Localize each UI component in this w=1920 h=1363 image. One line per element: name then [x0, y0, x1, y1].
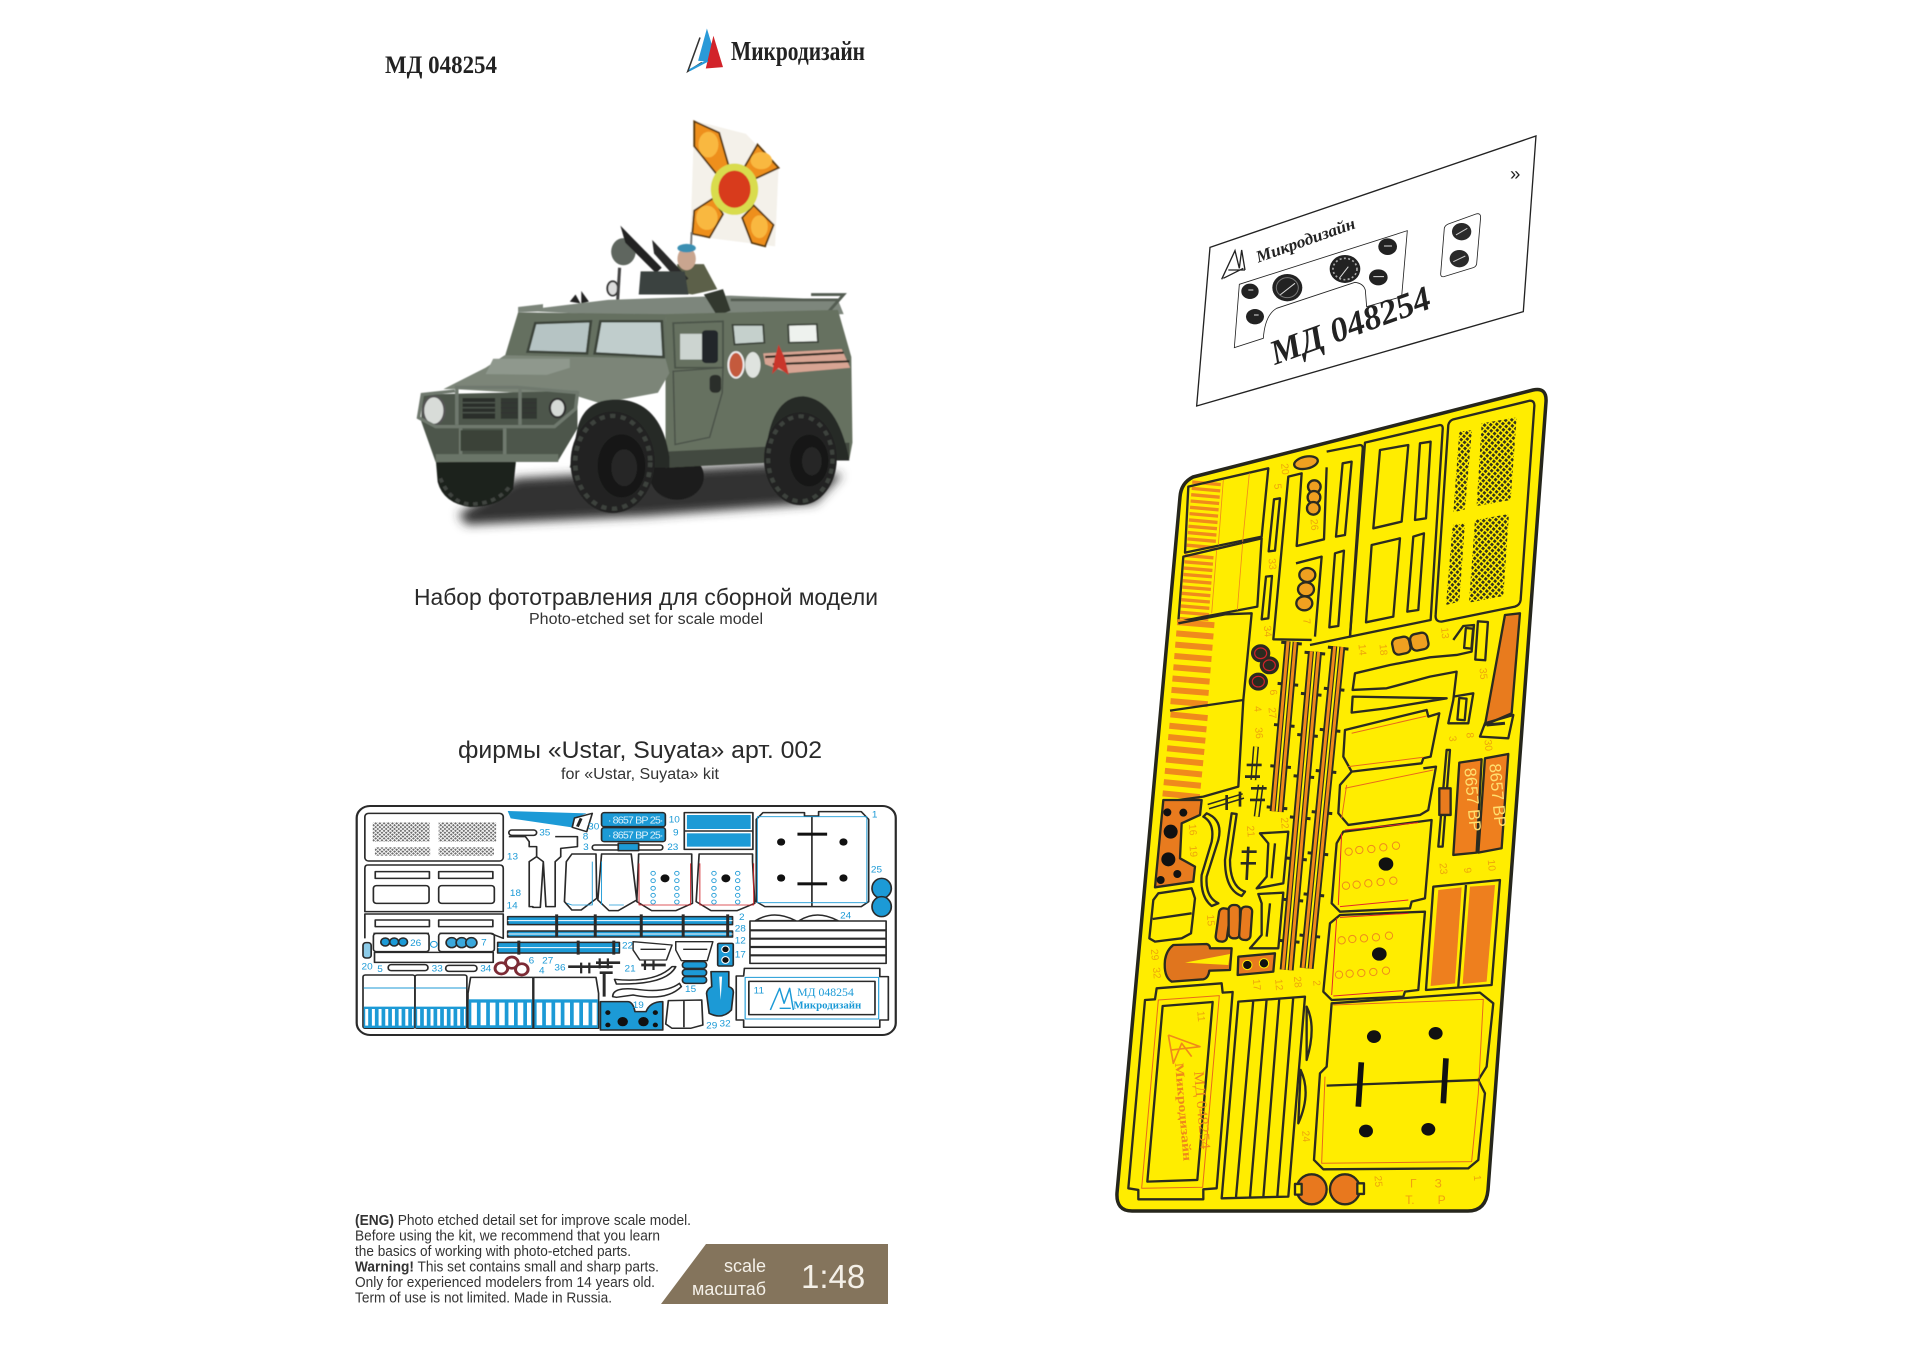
sheet outline [357, 806, 896, 1035]
hood [443, 355, 669, 403]
small plate 17 [1238, 953, 1275, 975]
slotted frame panel [1273, 445, 1363, 645]
rear wheel [764, 412, 837, 505]
blue part numbers [362, 810, 882, 1031]
T-shaped parts [1352, 621, 1488, 723]
part numbers [1251, 463, 1493, 752]
clips and wires [568, 958, 681, 997]
part numbers: 5 [1271, 483, 1283, 490]
part numbers: 21 [1244, 825, 1256, 838]
part numbers: 28 [1291, 976, 1303, 989]
part numbers: 34 [1261, 625, 1273, 638]
sheet outline [1197, 136, 1536, 406]
centre rear wheel [650, 453, 704, 500]
dashboard decal [1234, 231, 1407, 348]
blue part numbers: 34 [480, 964, 492, 974]
blue part numbers: 9 [673, 828, 679, 838]
decal code: МД 048254 [1264, 279, 1436, 373]
round orange parts [1295, 1174, 1364, 1204]
heading: russian subtitle: Набор фототравления для сборной модели [414, 584, 878, 610]
blue part numbers: 2 [739, 912, 745, 923]
part numbers: Г [1410, 1176, 1417, 1190]
part numbers: 3 [1446, 735, 1458, 742]
part numbers: 32 [1150, 967, 1162, 980]
closing quote mark: » [1510, 163, 1520, 184]
door [673, 368, 723, 444]
part numbers: 16 [1186, 824, 1198, 836]
small plate 17 [718, 943, 733, 966]
part numbers: 23 [1436, 863, 1448, 875]
warning text block [355, 1213, 691, 1306]
orange rectangles [1426, 880, 1500, 990]
roof [520, 296, 844, 318]
part numbers: 35 [1476, 668, 1488, 680]
blue part numbers: 14 [507, 901, 518, 911]
blue part numbers: 7 [481, 938, 487, 948]
icon: small logo [1222, 250, 1245, 279]
orange wedge part [1480, 613, 1520, 738]
blue part numbers: 21 [625, 964, 636, 974]
part numbers: 17 [1250, 979, 1262, 991]
rear windows [673, 321, 723, 368]
blue part numbers: 22 [622, 941, 633, 951]
hinge piece [1149, 888, 1195, 942]
blue part numbers: 8 [583, 832, 588, 842]
part numbers: 22 [1278, 817, 1290, 830]
right front wheel [571, 412, 655, 513]
panel: yellow etched fret [1117, 390, 1546, 1211]
blue part numbers: 25 [871, 865, 882, 875]
blue part numbers: 29 [706, 1021, 717, 1031]
ground shadow [459, 464, 842, 525]
part numbers: 25 [1371, 1175, 1383, 1188]
scale label english: scale [724, 1256, 766, 1276]
warning text block: Warning! This set contains small and sharp parts. [355, 1260, 659, 1276]
part numbers: 18 [1376, 644, 1388, 656]
panel: instrument decal sheet [1197, 136, 1536, 406]
lower fret parts [1128, 800, 1500, 1207]
T-shaped parts [509, 837, 577, 907]
blue wedge part [508, 811, 592, 835]
panel: blue parts diagram [357, 806, 896, 1035]
upper fret parts [1167, 401, 1534, 970]
licence plates: 8657 ВР [1460, 767, 1485, 832]
blue part numbers: 18 [510, 888, 521, 899]
blue part numbers: 35 [539, 828, 550, 838]
part numbers: 12 [1272, 979, 1284, 991]
part numbers: 6 [1267, 689, 1278, 696]
louvre panel B [1167, 613, 1252, 802]
grille and bumper [419, 387, 577, 462]
warning text block: Only for experienced modelers from 14 years old. [355, 1275, 655, 1291]
scale badge [661, 1244, 888, 1304]
large floor panel [1314, 993, 1493, 1169]
small gauge decal [1441, 214, 1481, 277]
nameplate part 11: Микродизайн [1172, 1062, 1195, 1162]
blue part numbers: 12 [735, 936, 746, 946]
blue part numbers: 20 [362, 962, 373, 972]
blue part numbers: 4 [539, 966, 545, 976]
nameplate part 11 [736, 968, 888, 1027]
long strips [1269, 498, 1280, 551]
part numbers: 24 [1299, 1130, 1311, 1143]
part numbers: 11 [1194, 1011, 1206, 1022]
door panels with holes [1323, 820, 1432, 1000]
part numbers: 29 [1148, 949, 1160, 961]
part numbers: Р [1438, 1193, 1446, 1207]
blue part numbers: 19 [633, 1000, 644, 1011]
part numbers: 13 [1438, 627, 1450, 640]
blue part numbers: 3 [583, 842, 589, 853]
twin ovals [1391, 632, 1430, 656]
part numbers: 19 [1187, 845, 1198, 858]
vehicle illustration with flag [419, 121, 852, 525]
blue rectangle parts [684, 813, 753, 849]
brand name: Микродизайн [731, 36, 865, 66]
nameplate part 11: МД 048254 [1190, 1071, 1213, 1151]
licence plates: 8657 ВР [1485, 763, 1510, 828]
mesh panel [365, 813, 503, 861]
part numbers: З [1435, 1176, 1442, 1190]
blue part numbers: 15 [685, 984, 696, 995]
clips [1208, 747, 1267, 817]
blue part numbers: 26 [410, 938, 421, 949]
bottom louvre panels [363, 975, 599, 1028]
orange cylinder [1165, 944, 1232, 982]
scale value: 1:48 [801, 1258, 865, 1295]
blue part numbers: 6 [529, 956, 534, 966]
part numbers: 7 [1300, 618, 1312, 625]
blue part numbers: 33 [432, 964, 443, 974]
blue part numbers: 10 [669, 815, 680, 825]
part numbers: 15 [1204, 914, 1216, 927]
warning text block: the basics of working with photo-etched parts. [355, 1244, 631, 1260]
part numbers: 27 [1266, 707, 1277, 720]
part numbers: 9 [1461, 867, 1473, 874]
decal brand name: Микродизайн [1252, 214, 1358, 267]
blue perforated plate 16 [600, 1002, 663, 1030]
nameplate part 11 [1128, 983, 1233, 1199]
blue part numbers: 36 [554, 963, 566, 973]
nameplate part 11: Микродизайн [793, 1001, 861, 1011]
part numbers [1148, 817, 1497, 1207]
ring inner colour [1252, 648, 1275, 687]
blue part numbers: 17 [735, 950, 746, 960]
door panels [564, 854, 755, 911]
lower frame panel with round parts [363, 914, 528, 975]
front cab [505, 312, 667, 361]
orange perforated plate [1155, 800, 1202, 887]
large floor panel [756, 812, 869, 907]
blue part numbers: 30 [588, 822, 599, 832]
licence plates [1438, 750, 1510, 855]
flag [689, 121, 779, 293]
part numbers: 14 [1355, 644, 1367, 656]
round side discs [1298, 1007, 1312, 1123]
part numbers: 8 [1463, 732, 1475, 739]
part numbers: 30 [1481, 739, 1493, 752]
heading: english subtitle: Photo-etched set for scale model [529, 611, 763, 628]
left front wheel [436, 459, 516, 507]
part numbers: 26 [1307, 519, 1319, 531]
licence plates: · 8657 ВР 25· [608, 816, 664, 826]
capsule cluster [1215, 905, 1252, 942]
small capsule cluster [682, 962, 707, 983]
blue part numbers: 23 [667, 842, 678, 853]
product code heading: МД 048254 [385, 52, 497, 79]
heading: kit name english: for «Ustar, Suyata» kit [561, 766, 720, 783]
window frame panel [365, 865, 503, 912]
scale label russian: масштаб [692, 1279, 766, 1299]
strip part [592, 843, 663, 851]
blue part numbers: 28 [735, 924, 746, 934]
fret outline [1117, 390, 1546, 1211]
rings [1250, 645, 1278, 690]
blue cylinder part [707, 972, 733, 1016]
blue part numbers: 13 [507, 852, 518, 862]
licence plates [602, 813, 665, 842]
turret with guns and soldier [570, 226, 717, 303]
window frame panel [1350, 425, 1443, 637]
front wheel arch [570, 399, 669, 468]
blue part numbers: 32 [720, 1019, 731, 1029]
door panels [1338, 710, 1439, 825]
rear body [666, 310, 852, 468]
licence plates: · 8657 ВР 25· [608, 831, 664, 841]
part numbers: 33 [1266, 558, 1277, 571]
round blue parts [756, 878, 891, 921]
hinge piece [666, 1000, 703, 1028]
part numbers: 36 [1252, 727, 1264, 740]
blue part numbers: 11 [754, 986, 764, 996]
parallel strip parts [750, 921, 886, 963]
warning text block: (ENG) Photo etched detail set for improve scale model. [355, 1213, 691, 1229]
blue part numbers: 1 [872, 810, 877, 820]
heading: kit name russian: фирмы «Ustar, Suyata» арт. 002 [458, 737, 822, 764]
blue part numbers: 27 [542, 956, 553, 966]
long rails [1277, 642, 1338, 970]
strip parts [1222, 997, 1305, 1198]
mesh panel [1436, 401, 1534, 622]
nameplate part 11: МД 048254 [797, 986, 854, 999]
blue part numbers: 16 [617, 1002, 628, 1013]
long blue rails [498, 914, 733, 955]
round parts [1293, 454, 1321, 610]
part numbers: 2 [1310, 980, 1322, 987]
part numbers: 10 [1485, 859, 1497, 872]
small clip [1241, 847, 1257, 880]
part numbers: Т. [1405, 1193, 1415, 1207]
trapezoid parts [1250, 832, 1288, 948]
part numbers: 1 [1471, 1175, 1482, 1182]
warning text block: Term of use is not limited. Made in Russia. [355, 1290, 612, 1306]
part numbers: 20 [1278, 463, 1290, 476]
wires [1201, 813, 1245, 906]
louvre panel A [1178, 468, 1268, 622]
blue part numbers: 5 [377, 964, 383, 975]
part numbers: 4 [1251, 706, 1263, 713]
icon: sail logo [688, 29, 723, 71]
trapezoid parts [633, 942, 713, 961]
brand logo [688, 29, 865, 71]
blue part numbers: 24 [840, 911, 852, 921]
warning text block: Before using the kit, we recommend that you learn [355, 1228, 660, 1244]
windshield [528, 321, 591, 353]
ribbon and emblems [728, 345, 850, 378]
